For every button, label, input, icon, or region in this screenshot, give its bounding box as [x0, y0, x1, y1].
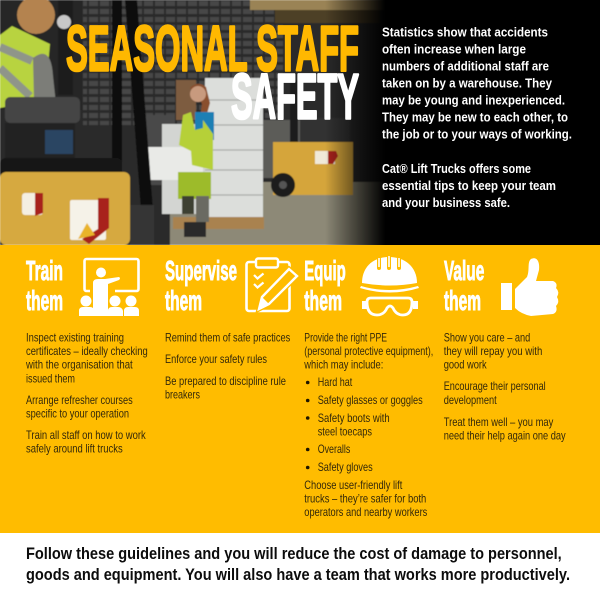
text: train tips: Arrange refresher courses	[26, 393, 133, 407]
heading: supervise them	[165, 255, 237, 316]
heading: supervise them: them	[165, 285, 202, 316]
text: value tips: they will repay you with	[444, 344, 542, 358]
bullet list: PPE items: Overalls	[318, 442, 350, 456]
text: value tips: good work	[444, 358, 487, 372]
icon: thumbs up	[501, 258, 558, 316]
intro text: numbers of additional staff are	[382, 58, 549, 74]
intro text: Cat® Lift Trucks offers some	[382, 161, 531, 176]
intro text: Statistics show that accidents	[382, 24, 548, 40]
title: SAFETY	[231, 60, 359, 132]
text: equip tips: Provide the right PPE	[304, 330, 387, 344]
heading: value them: them	[444, 285, 481, 316]
text: supervise tips	[165, 330, 290, 402]
heading: train them: them	[26, 285, 63, 316]
heading: supervise them: Supervise	[165, 255, 237, 286]
text: equip tips: (personal protective equipment),	[304, 344, 433, 358]
heading: equip them: Equip	[304, 255, 346, 286]
bullet list: PPE items: Safety gloves	[318, 460, 373, 474]
text: value tips: Treat them well – you may	[444, 415, 553, 429]
intro text: the job or to your ways of working.	[382, 126, 572, 142]
text: equip tips: operators and nearby workers	[304, 505, 427, 519]
text: value tips: development	[444, 393, 497, 407]
panel: train them	[25, 255, 148, 456]
text: train tips: Train all staff on how to work	[26, 428, 146, 442]
text: value tips: Encourage their personal	[444, 379, 546, 393]
bullet list: PPE items	[306, 375, 423, 474]
intro text: often increase when large	[382, 42, 526, 56]
text: equip tips: trucks – they’re safer for both	[304, 492, 426, 506]
black intro panel	[385, 0, 600, 245]
panel: value them	[444, 255, 566, 442]
text: supervise tips: breakers	[165, 388, 200, 402]
intro text: and your business safe.	[382, 195, 510, 210]
title	[66, 12, 359, 132]
intro text: They may be new to each other, to	[382, 110, 568, 124]
text: value tips: need their help again one day	[444, 428, 566, 442]
bullet list: PPE items: Hard hat	[318, 375, 353, 389]
photo: warehouse with forklifts	[0, 0, 385, 245]
text: value tips: Show you care – and	[444, 330, 530, 344]
icon: hard hat and goggles	[360, 256, 419, 315]
icon: clipboard and pencil	[246, 258, 297, 311]
intro text: may be young and inexperienced.	[382, 92, 565, 108]
text: supervise tips: Enforce your safety rules	[165, 352, 267, 366]
heading: train them: Train	[26, 255, 63, 286]
photo fade to black panel	[325, 0, 385, 245]
bullet list: PPE items: Safety boots with	[318, 411, 390, 425]
heading: equip them	[304, 255, 346, 316]
bullet list: PPE items: Safety glasses or goggles	[318, 393, 423, 407]
intro text: essential tips to keep your team	[382, 178, 556, 193]
heading: value them: Value	[444, 255, 484, 286]
panel: supervise them	[165, 255, 297, 402]
text: train tips: specific to your operation	[26, 406, 129, 420]
text: train tips: Inspect existing training	[26, 330, 124, 344]
icon: teacher at board	[79, 259, 139, 316]
text: supervise tips: Be prepared to discipline rule	[165, 374, 286, 388]
text: value tips	[444, 330, 566, 442]
panel: equip them	[304, 255, 433, 519]
text: train tips	[25, 330, 148, 456]
text: train tips: safely around lift trucks	[26, 442, 123, 456]
footer conclusion text	[26, 544, 570, 584]
text: equip tips: Choose user-friendly lift	[304, 478, 403, 492]
bullet list: PPE items: steel toecaps	[318, 424, 372, 438]
heading: value them	[444, 255, 484, 316]
heading: equip them: them	[304, 285, 342, 316]
intro text	[382, 24, 572, 210]
panel: yellow tips band	[0, 245, 600, 533]
intro text: taken on by a warehouse. They	[382, 76, 553, 90]
text: supervise tips: Remind them of safe practices	[165, 330, 290, 344]
text: train tips: certificates – ideally checking	[26, 344, 148, 358]
text: equip tips: which may include:	[304, 358, 383, 372]
text: train tips: issued them	[26, 371, 75, 385]
text: equip tips	[304, 330, 433, 519]
heading: train them	[26, 255, 63, 316]
text: train tips: with the organisation that	[25, 358, 133, 372]
